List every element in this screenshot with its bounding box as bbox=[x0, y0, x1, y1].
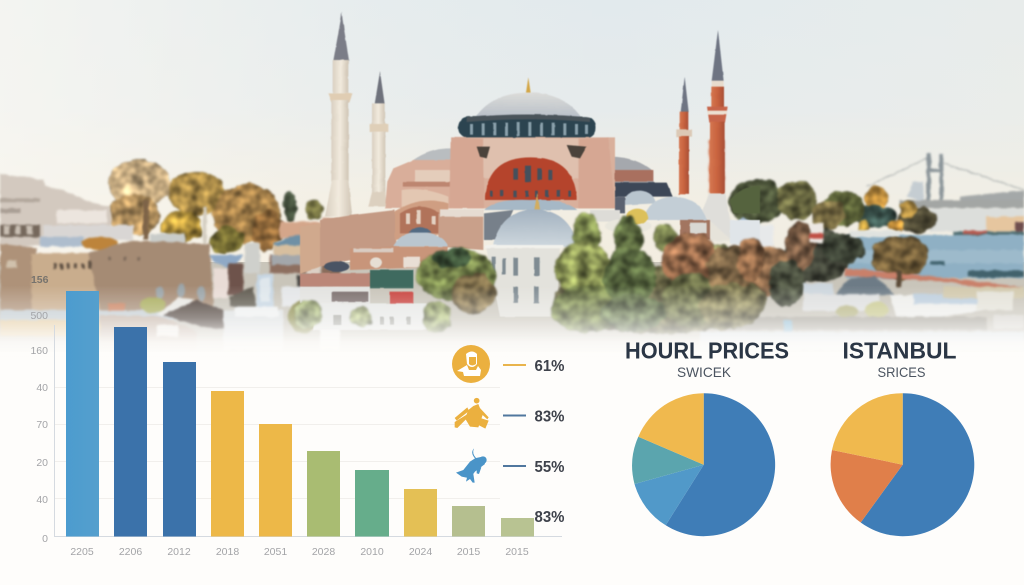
left city trees bbox=[107, 160, 323, 253]
x axis labels bbox=[70, 546, 529, 558]
side halves bbox=[413, 148, 451, 163]
main dome bbox=[458, 77, 596, 138]
icon: blue swimmer figure bbox=[456, 448, 487, 483]
right side domes bbox=[590, 186, 760, 243]
x axis labels: 2010 bbox=[360, 546, 384, 558]
x axis labels: 2051 bbox=[264, 546, 287, 558]
y axis labels: 20 bbox=[36, 457, 48, 469]
y axis labels: 40 bbox=[36, 382, 48, 394]
panel: hourly prices pie bbox=[625, 338, 789, 536]
foreground trees bbox=[295, 213, 767, 333]
left city district bbox=[0, 173, 340, 350]
x axis labels: 2024 bbox=[409, 546, 432, 558]
subheading: SRICES bbox=[878, 364, 926, 380]
lower band bbox=[0, 310, 213, 320]
right city houses bbox=[700, 140, 1024, 350]
heading: HOURL PRICES bbox=[625, 338, 789, 364]
photo backdrop: Istanbul skyline bbox=[0, 0, 1024, 360]
x axis labels: 2015 bbox=[457, 546, 480, 558]
heading: ISTANBUL bbox=[842, 338, 956, 364]
percentage callouts: 61% bbox=[534, 358, 565, 375]
facade with arch bbox=[449, 137, 615, 210]
icon: worker in yellow circle bbox=[452, 345, 490, 383]
x axis labels: 2206 bbox=[119, 546, 142, 558]
y axis labels: 70 bbox=[36, 419, 48, 431]
y axis labels bbox=[30, 274, 49, 545]
white fade into data area bbox=[0, 285, 1024, 357]
x axis labels: 2028 bbox=[312, 546, 335, 558]
left minarets bbox=[325, 12, 388, 217]
Hagia Sophia mosque bbox=[300, 12, 760, 330]
percentage callouts: 83% bbox=[534, 509, 565, 526]
percentage callouts: 83% bbox=[534, 408, 565, 426]
Bosphorus bridge and water bbox=[847, 153, 1024, 278]
percentage callouts bbox=[503, 358, 565, 526]
y axis labels: 160 bbox=[30, 345, 48, 357]
x axis labels: 2015 bbox=[505, 546, 529, 558]
front small dome and white building bbox=[485, 193, 578, 317]
icon: yellow figure bbox=[455, 398, 489, 429]
blue-roof house bbox=[210, 255, 243, 269]
y axis labels: 156 bbox=[31, 274, 49, 286]
x axis labels: 2205 bbox=[70, 546, 94, 558]
right city trees bbox=[688, 180, 937, 317]
percentage callouts: 55% bbox=[534, 459, 565, 476]
bar chart bbox=[30, 274, 562, 558]
right pink houses bbox=[280, 222, 320, 238]
small white houses bbox=[57, 210, 107, 223]
x axis labels: 2012 bbox=[167, 546, 191, 558]
subheading: SWICEK bbox=[677, 364, 732, 380]
pie chart bbox=[831, 393, 974, 536]
y axis labels: 500 bbox=[30, 310, 48, 322]
lower left walls bbox=[300, 201, 513, 330]
y axis labels: 0 bbox=[42, 533, 48, 545]
pie chart bbox=[632, 393, 775, 536]
x axis labels: 2018 bbox=[216, 546, 239, 558]
gridlines and axes bbox=[55, 388, 500, 498]
panel: Istanbul prices pie bbox=[831, 338, 974, 536]
right minarets bbox=[676, 30, 733, 242]
long brown buildings bbox=[0, 243, 37, 310]
bars bbox=[66, 291, 534, 536]
y axis labels: 40 bbox=[36, 494, 48, 506]
